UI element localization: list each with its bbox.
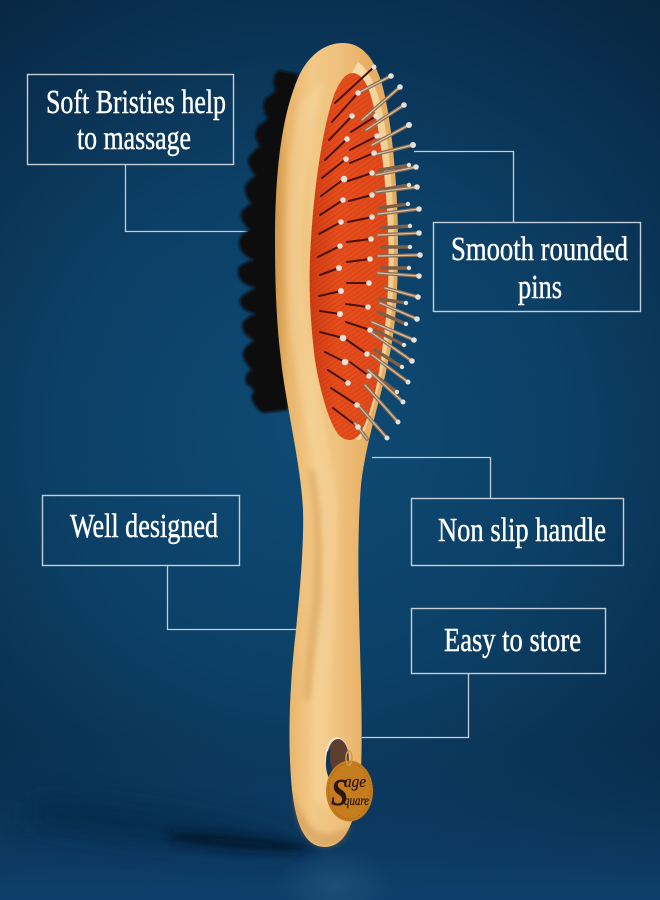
callout: easy to store: Easy to store bbox=[444, 622, 581, 659]
callout: soft bristles: Soft Bristies help bbox=[46, 84, 226, 121]
bottom shade bbox=[292, 790, 352, 847]
callout: non slip handle: Non slip handle bbox=[438, 512, 606, 549]
callout: easy to store bbox=[412, 608, 606, 674]
callout: well designed bbox=[42, 496, 240, 566]
pin heads bbox=[336, 64, 423, 440]
handle hole bbox=[325, 737, 349, 779]
pin stems bbox=[355, 76, 420, 439]
bristles bbox=[238, 70, 300, 413]
logo tag bbox=[326, 751, 373, 822]
callout: well designed: Well designed bbox=[70, 508, 218, 545]
callout: soft bristles: to massage bbox=[77, 120, 191, 157]
callout: smooth rounded pins bbox=[434, 222, 640, 312]
connector lines bbox=[126, 152, 514, 738]
callout: non slip handle bbox=[412, 498, 624, 566]
callout: smooth rounded pins: pins bbox=[518, 269, 562, 306]
logo tag: age bbox=[344, 772, 366, 791]
callout: soft bristles bbox=[28, 74, 234, 164]
wood highlight bbox=[287, 80, 338, 810]
brush body bbox=[275, 43, 423, 847]
wood streak bbox=[304, 470, 322, 700]
logo tag: S bbox=[331, 772, 348, 814]
pin shadows bbox=[318, 67, 377, 427]
inner rim bbox=[345, 62, 394, 440]
logo tag: quare bbox=[344, 794, 369, 809]
red pad bbox=[310, 73, 389, 440]
